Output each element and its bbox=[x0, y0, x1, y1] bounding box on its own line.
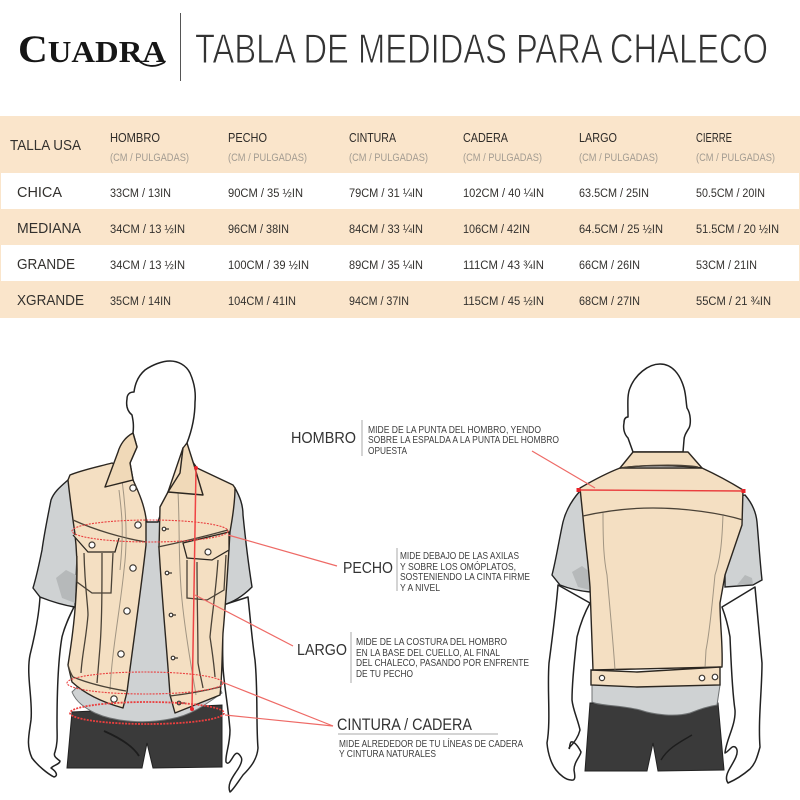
callout: hombro bbox=[291, 420, 559, 457]
table header row: CIERRE bbox=[696, 131, 732, 145]
row: xgrande: 35CM / 14IN bbox=[110, 296, 171, 308]
row: grande: 100CM / 39 ½IN bbox=[228, 260, 309, 272]
measure markers: pecho, cadera, cintura, largo bbox=[67, 466, 228, 724]
table header row: CADERA bbox=[463, 131, 509, 145]
figure: front view with vest bbox=[28, 361, 258, 792]
row: grande: 34CM / 13 ½IN bbox=[110, 260, 185, 272]
table header row: (CM / PULGADAS) bbox=[110, 152, 189, 164]
right sleeve bbox=[215, 488, 252, 605]
back hem band with buttons bbox=[591, 667, 720, 687]
row: grande: 89CM / 35 ¼IN bbox=[349, 260, 423, 272]
table header row: (CM / PULGADAS) bbox=[228, 152, 307, 164]
row: mediana: 96CM / 38IN bbox=[228, 224, 289, 236]
collar left bbox=[105, 433, 137, 487]
shirt bbox=[72, 518, 222, 722]
row: mediana: 64.5CM / 25 ½IN bbox=[579, 224, 663, 236]
measure marker: hombro bbox=[576, 488, 746, 493]
row: xgrande: 55CM / 21 ¾IN bbox=[696, 296, 771, 308]
back left sleeve bbox=[552, 491, 596, 592]
size table bbox=[0, 116, 800, 318]
table header row bbox=[10, 131, 775, 164]
figure: back view with vest bbox=[547, 364, 762, 783]
back collar bbox=[620, 452, 702, 468]
callout: hombro: SOBRE LA ESPALDA A LA PUNTA DEL HOMBRO bbox=[368, 435, 559, 446]
left sleeve shading bbox=[56, 570, 76, 603]
callout: cintura / cadera: CINTURA / CADERA bbox=[337, 715, 473, 734]
table header row: CINTURA bbox=[349, 131, 397, 145]
trouser crease bbox=[104, 731, 139, 756]
row: chica: 50.5CM / 20IN bbox=[696, 188, 765, 200]
callout: largo bbox=[297, 632, 529, 683]
row: xgrande bbox=[17, 292, 771, 309]
callout: pecho bbox=[343, 548, 530, 594]
callout: largo: DEL CHALECO, PASANDO POR ENFRENTE bbox=[356, 658, 529, 669]
row: grande: 53CM / 21IN bbox=[696, 260, 757, 272]
callout: cintura / cadera: Y CINTURA NATURALES bbox=[339, 749, 436, 760]
table bands bbox=[0, 116, 800, 318]
callout: largo: EN LA BASE DEL CUELLO, AL FINAL bbox=[356, 648, 501, 659]
callout: largo: MIDE DE LA COSTURA DEL HOMBRO bbox=[356, 637, 507, 648]
back right sleeve shading bbox=[737, 575, 753, 585]
row: grande: GRANDE bbox=[17, 256, 75, 273]
back right arm bbox=[722, 587, 762, 783]
table header row: (CM / PULGADAS) bbox=[349, 152, 428, 164]
callout: pecho: PECHO bbox=[343, 560, 393, 577]
row: grande bbox=[17, 256, 757, 273]
row: xgrande: 68CM / 27IN bbox=[579, 296, 640, 308]
table header row: (CM / PULGADAS) bbox=[579, 152, 658, 164]
callout: hombro: MIDE DE LA PUNTA DEL HOMBRO, YENDO bbox=[368, 425, 541, 436]
leader lines bbox=[195, 451, 595, 726]
row: chica: 33CM / 13IN bbox=[110, 188, 171, 200]
left sleeve bbox=[33, 480, 80, 607]
callout: cintura / cadera: MIDE ALREDEDOR DE TU LÍNEAS DE CADERA bbox=[339, 739, 523, 750]
row: chica: 90CM / 35 ½IN bbox=[228, 188, 303, 200]
back trouser crease bbox=[661, 735, 692, 760]
back head and neck bbox=[624, 364, 690, 452]
left arm bbox=[28, 597, 74, 777]
row: mediana: 34CM / 13 ½IN bbox=[110, 224, 185, 236]
row: chica bbox=[17, 184, 765, 201]
callout: hombro: HOMBRO bbox=[291, 430, 356, 447]
trousers bbox=[67, 705, 222, 768]
row: xgrande: 115CM / 45 ½IN bbox=[463, 296, 544, 308]
row: mediana: 84CM / 33 ¼IN bbox=[349, 224, 423, 236]
table header row: TALLA USA bbox=[10, 137, 81, 154]
back shirt bbox=[592, 685, 720, 715]
head and neck bbox=[127, 361, 195, 522]
row: chica: 102CM / 40 ¼IN bbox=[463, 188, 544, 200]
row: grande: 111CM / 43 ¾IN bbox=[463, 260, 544, 272]
vest left panel bbox=[68, 463, 146, 708]
right arm bbox=[223, 597, 258, 792]
row: chica: CHICA bbox=[17, 184, 62, 201]
callout: pecho: Y A NIVEL bbox=[400, 583, 441, 594]
row: xgrande: XGRANDE bbox=[17, 292, 84, 309]
row: mediana: 51.5CM / 20 ½IN bbox=[696, 224, 779, 236]
row: grande: 66CM / 26IN bbox=[579, 260, 640, 272]
row: xgrande: 94CM / 37IN bbox=[349, 296, 409, 308]
callout: pecho: MIDE DEBAJO DE LAS AXILAS bbox=[400, 551, 519, 562]
vest right details bbox=[158, 492, 229, 696]
callout: hombro: OPUESTA bbox=[368, 446, 407, 457]
table header row: (CM / PULGADAS) bbox=[696, 152, 775, 164]
row: xgrande: 104CM / 41IN bbox=[228, 296, 296, 308]
callout: largo: DE TU PECHO bbox=[356, 669, 413, 680]
row: mediana: 106CM / 42IN bbox=[463, 224, 530, 236]
collar right bbox=[168, 443, 203, 495]
row: mediana: MEDIANA bbox=[17, 220, 81, 237]
callout: cintura / cadera bbox=[337, 715, 523, 760]
back right sleeve bbox=[725, 495, 762, 587]
back vest seams bbox=[583, 465, 743, 670]
back left sleeve shading bbox=[572, 566, 590, 590]
callout: pecho: Y SOBRE LOS OMÓPLATOS, bbox=[400, 562, 516, 573]
row: chica: 79CM / 31 ¼IN bbox=[349, 188, 423, 200]
table header row: PECHO bbox=[228, 131, 267, 145]
row: mediana bbox=[17, 220, 779, 237]
vest front buttons bbox=[89, 485, 211, 705]
row: chica: 63.5CM / 25IN bbox=[579, 188, 649, 200]
vest left details bbox=[68, 480, 146, 691]
logo: Cuadra: CUADRA bbox=[18, 28, 167, 71]
back trousers bbox=[585, 703, 724, 771]
table header row: HOMBRO bbox=[110, 131, 160, 145]
vest right panel bbox=[159, 448, 235, 713]
callout: pecho: SOSTENIENDO LA CINTA FIRME bbox=[400, 572, 530, 583]
table header row: (CM / PULGADAS) bbox=[463, 152, 542, 164]
back vest body bbox=[580, 468, 743, 670]
back left arm bbox=[547, 585, 590, 780]
callout: largo: LARGO bbox=[297, 642, 347, 659]
header divider bbox=[180, 13, 181, 81]
table header row: LARGO bbox=[579, 131, 617, 145]
